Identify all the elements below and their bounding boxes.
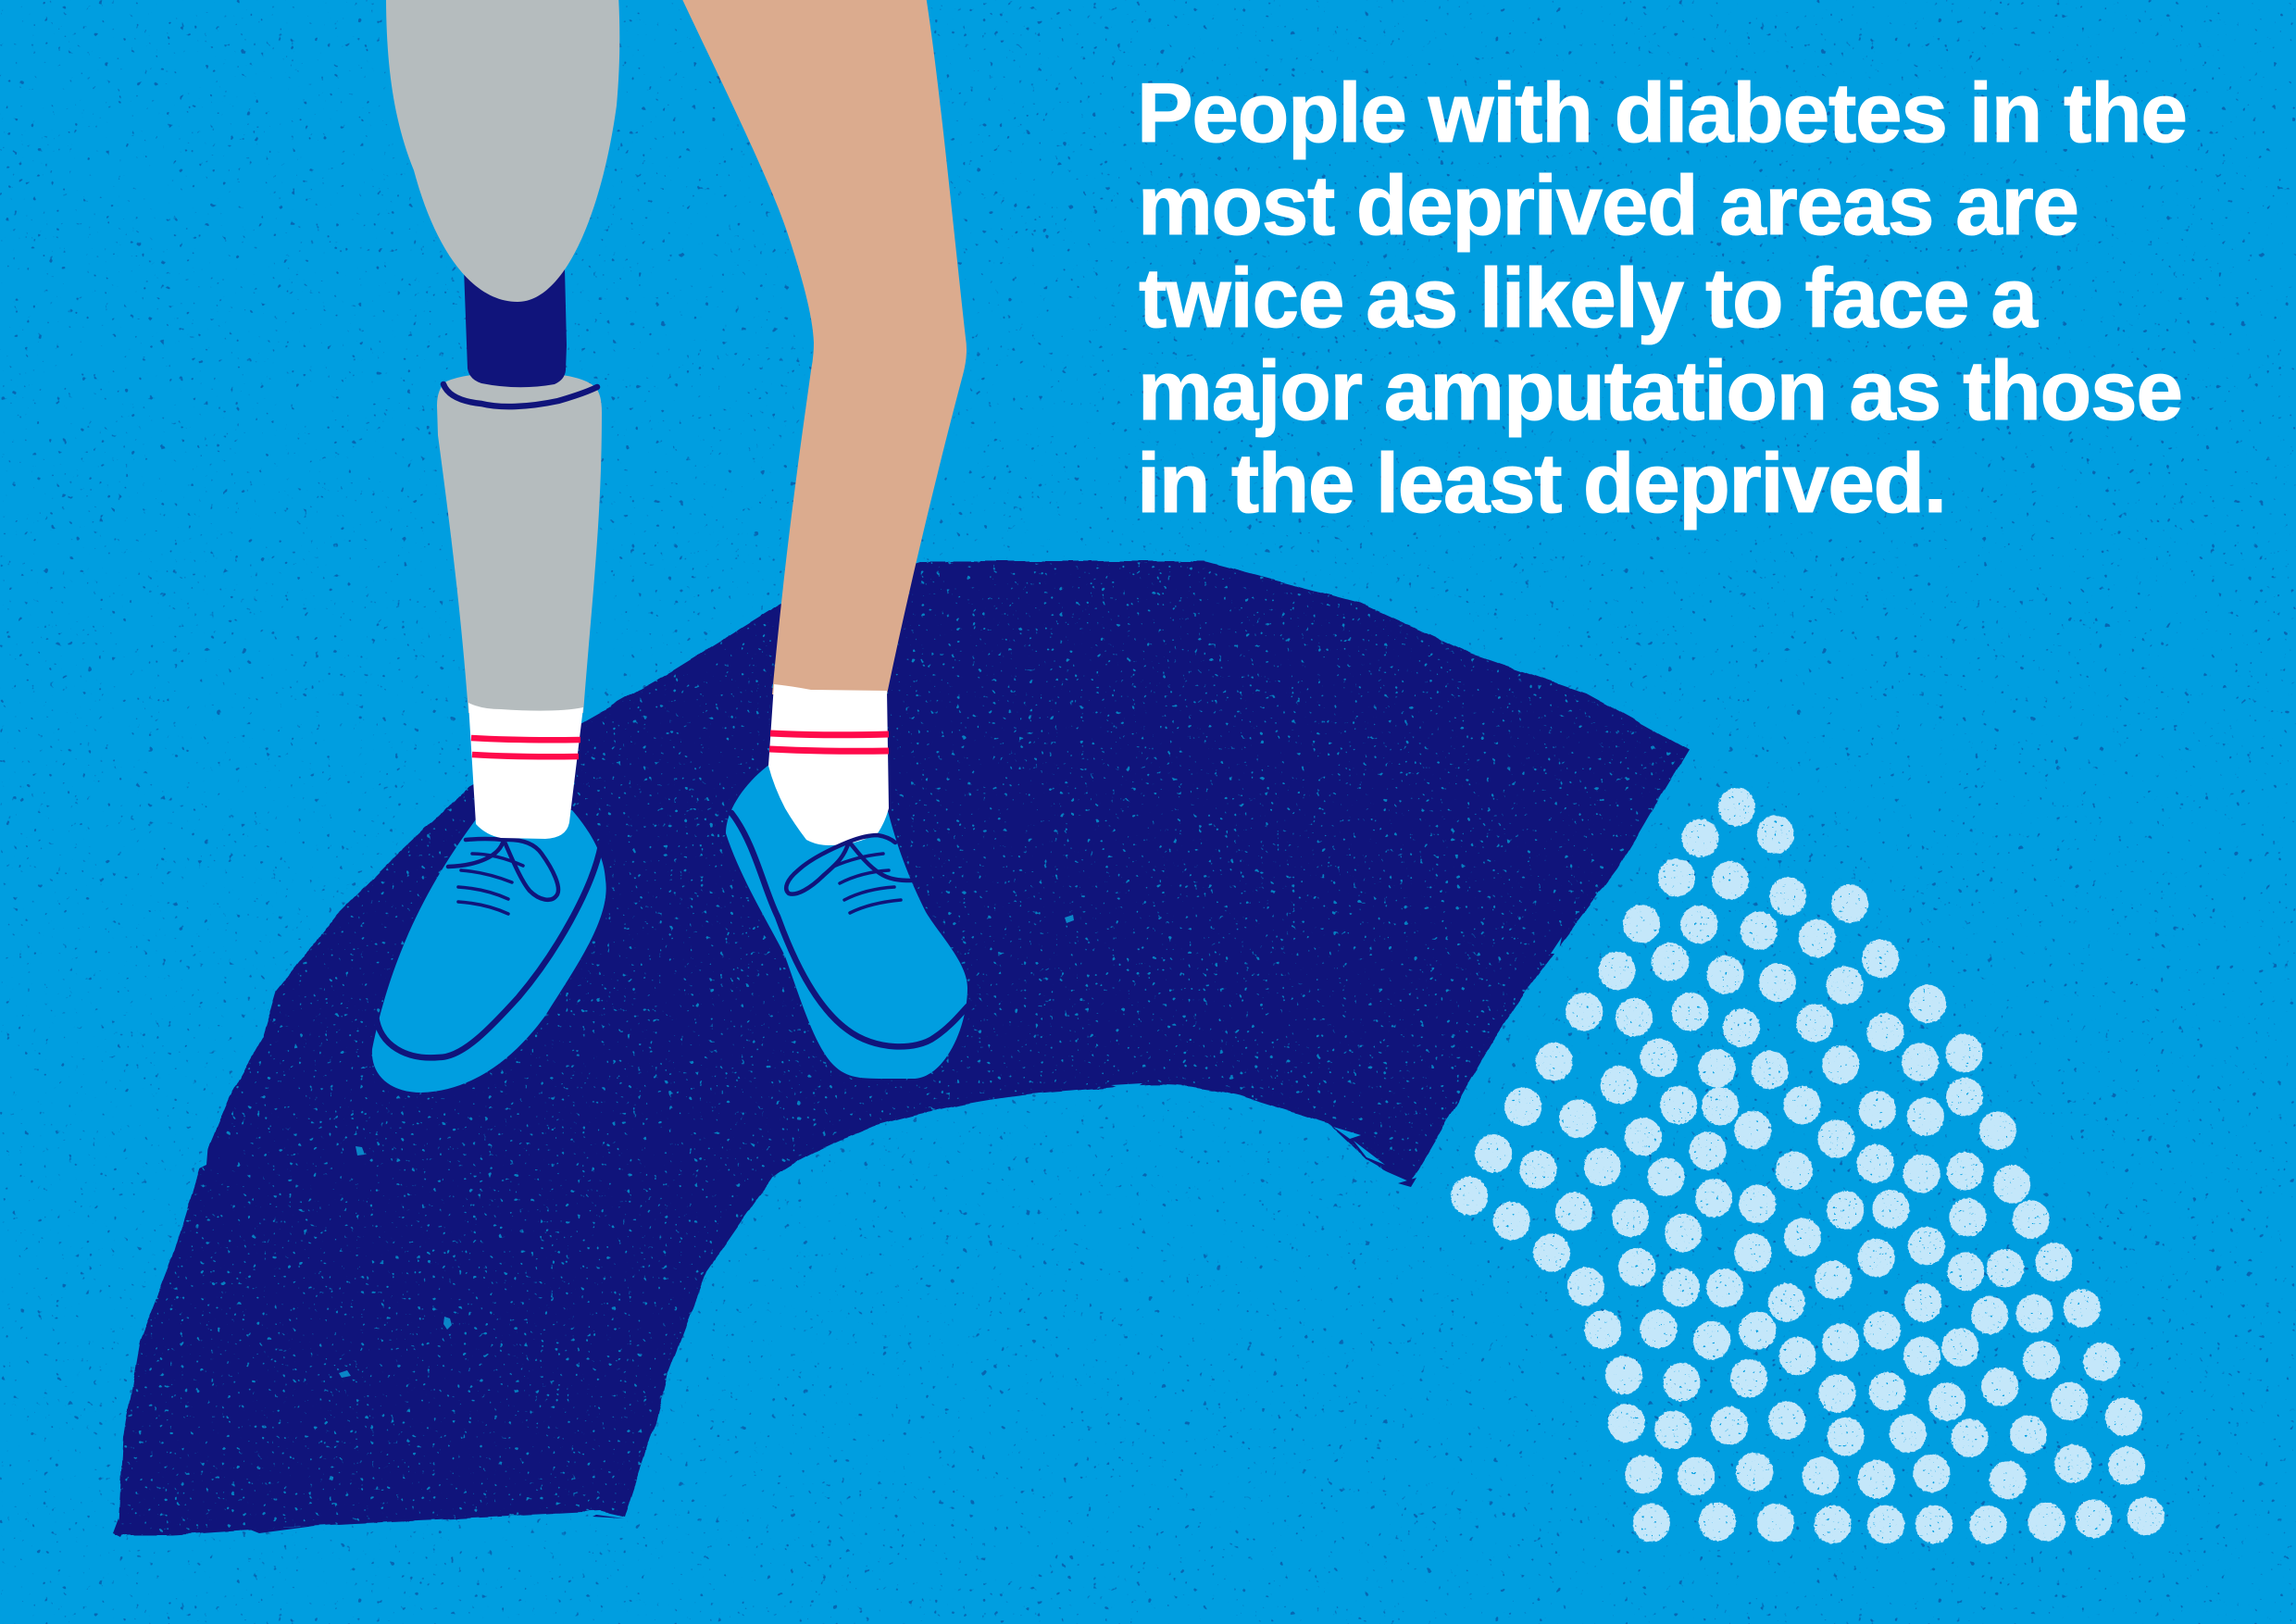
left sock stripes: [471, 738, 580, 756]
right shoe welt line: [731, 813, 967, 1046]
headline text: twice as likely to face a: [1139, 252, 2039, 345]
shin rim line: [443, 384, 597, 406]
left shoe laces: [448, 839, 558, 900]
right sock: [768, 684, 889, 845]
headline text: People with diabetes in the: [1137, 67, 2188, 160]
dark navy curved road shape: [113, 560, 1690, 1537]
prosthetic socket: [386, 0, 619, 302]
prosthetic leg: [386, 0, 619, 713]
right sock stripes: [769, 733, 889, 751]
left sock body: [468, 703, 583, 839]
right leg skin: [680, 0, 967, 694]
right shoe body: [726, 764, 967, 1079]
left shoe body: [372, 810, 606, 1093]
headline text: most deprived areas are: [1138, 159, 2079, 253]
headline text: in the least deprived.: [1137, 437, 1947, 531]
right shoe: [726, 684, 967, 1079]
left shoe welt line: [376, 845, 601, 1057]
left shoe: [372, 810, 606, 1093]
headline text: major amputation as those: [1138, 344, 2183, 438]
prosthetic lower shin: [437, 372, 602, 713]
prosthetic knee joint: [464, 269, 567, 387]
rounded dots pattern: [1451, 788, 2165, 1544]
right shoe laces: [786, 835, 911, 894]
left sock: [468, 703, 583, 839]
right shoe eyelet lines: [833, 854, 901, 913]
left shoe eyelet lines: [458, 854, 523, 914]
right sock body: [768, 684, 889, 845]
headline text: [1137, 67, 2188, 531]
